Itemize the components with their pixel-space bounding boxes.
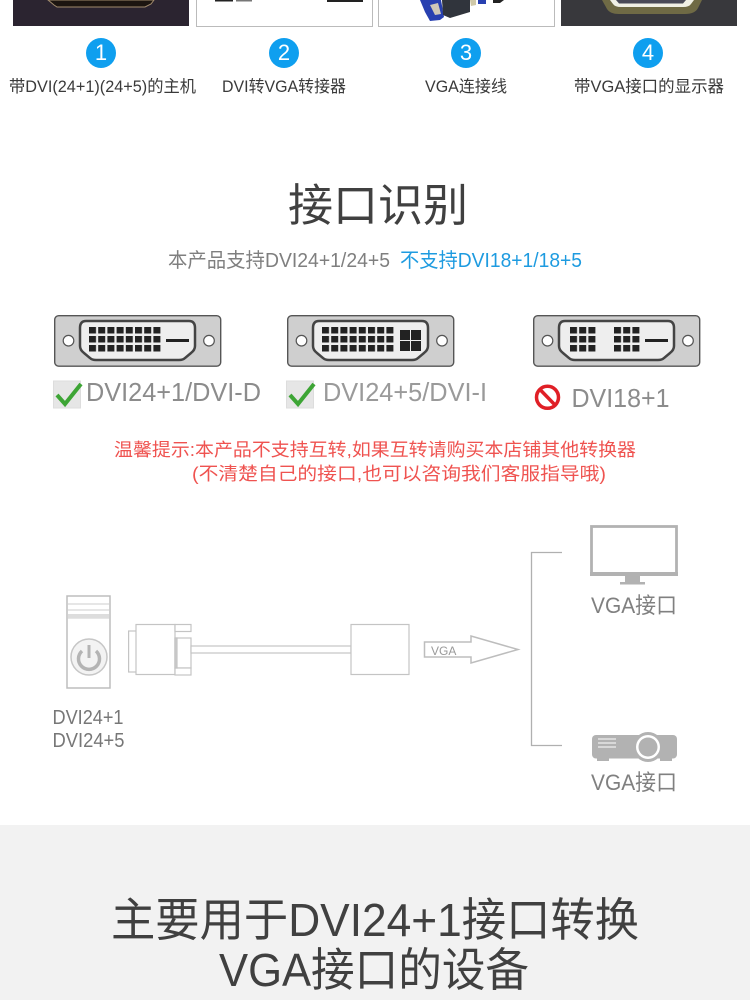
subtitle: supported interfaces: 本产品支持DVI24+1/24+5 [168, 249, 390, 272]
heading: interface identification: 接口识别 [288, 180, 468, 231]
badge: 2 [269, 38, 299, 68]
label: DVI24+1/DVI-D: DVI24+1/DVI-D [86, 379, 261, 407]
icon: projector [592, 732, 677, 762]
icon: prohibited [534, 384, 560, 410]
photo: DVI to VGA adapter [196, 0, 373, 27]
badge: 4 [633, 38, 663, 68]
connector: DVI24+5 [287, 315, 454, 367]
panel: product photo strip [13, 0, 737, 27]
badge: 3: 3 [460, 40, 472, 65]
heading: main usage [111, 894, 639, 996]
label: monitor VGA: VGA接口 [591, 593, 677, 618]
panel: usage section [0, 825, 750, 1000]
label: cable: VGA连接线 [425, 77, 507, 96]
badge: 4: 4 [642, 40, 654, 65]
bracket [530, 552, 562, 746]
notice: consult: (不清楚自己的接口,也可以咨询我们客服指导哦) [192, 464, 606, 484]
arrow: VGA [424, 635, 520, 664]
photo: monitor VGA port [561, 0, 737, 26]
subtitle: supported interfaces [168, 249, 582, 272]
badge: 2: 2 [278, 40, 290, 65]
label: DVI24+5/DVI-I: DVI24+5/DVI-I [323, 379, 487, 407]
label: host interfaces: DVI24+1 [52, 707, 124, 729]
label: host: 带DVI(24+1)(24+5)的主机 [9, 77, 196, 96]
badge: 1: 1 [95, 40, 107, 65]
subtitle: supported interfaces: 不支持DVI18+1/18+5 [400, 249, 582, 272]
diagram: adapter cable [128, 624, 410, 676]
label: monitor: 带VGA接口的显示器 [574, 77, 724, 96]
arrow: VGA: VGA [431, 644, 456, 658]
icon: check 2 [286, 380, 316, 408]
label: DVI18+1: DVI18+1 [572, 385, 670, 413]
icon: monitor [590, 525, 678, 584]
icon: check 1 [53, 380, 82, 408]
photo: VGA cable [378, 0, 555, 27]
badge: 1 [86, 38, 116, 68]
notice: warm tip: 温馨提示:本产品不支持互转,如果互转请购买本店铺其他转换器 [114, 440, 636, 460]
connector: DVI18+1 [533, 315, 700, 367]
diagram: host computer [66, 595, 111, 689]
label: projector VGA: VGA接口 [591, 770, 677, 795]
badge: 3 [451, 38, 481, 68]
connector: DVI24+1 [54, 315, 222, 367]
heading: main usage: VGA接口的设备 [219, 944, 529, 996]
label: host interfaces: DVI24+5 [52, 730, 124, 752]
label: host interfaces [52, 707, 124, 752]
photo: DVI host port [13, 0, 189, 26]
heading: main usage: 主要用于DVI24+1接口转换 [111, 894, 639, 946]
label: adapter: DVI转VGA转接器 [222, 77, 346, 96]
